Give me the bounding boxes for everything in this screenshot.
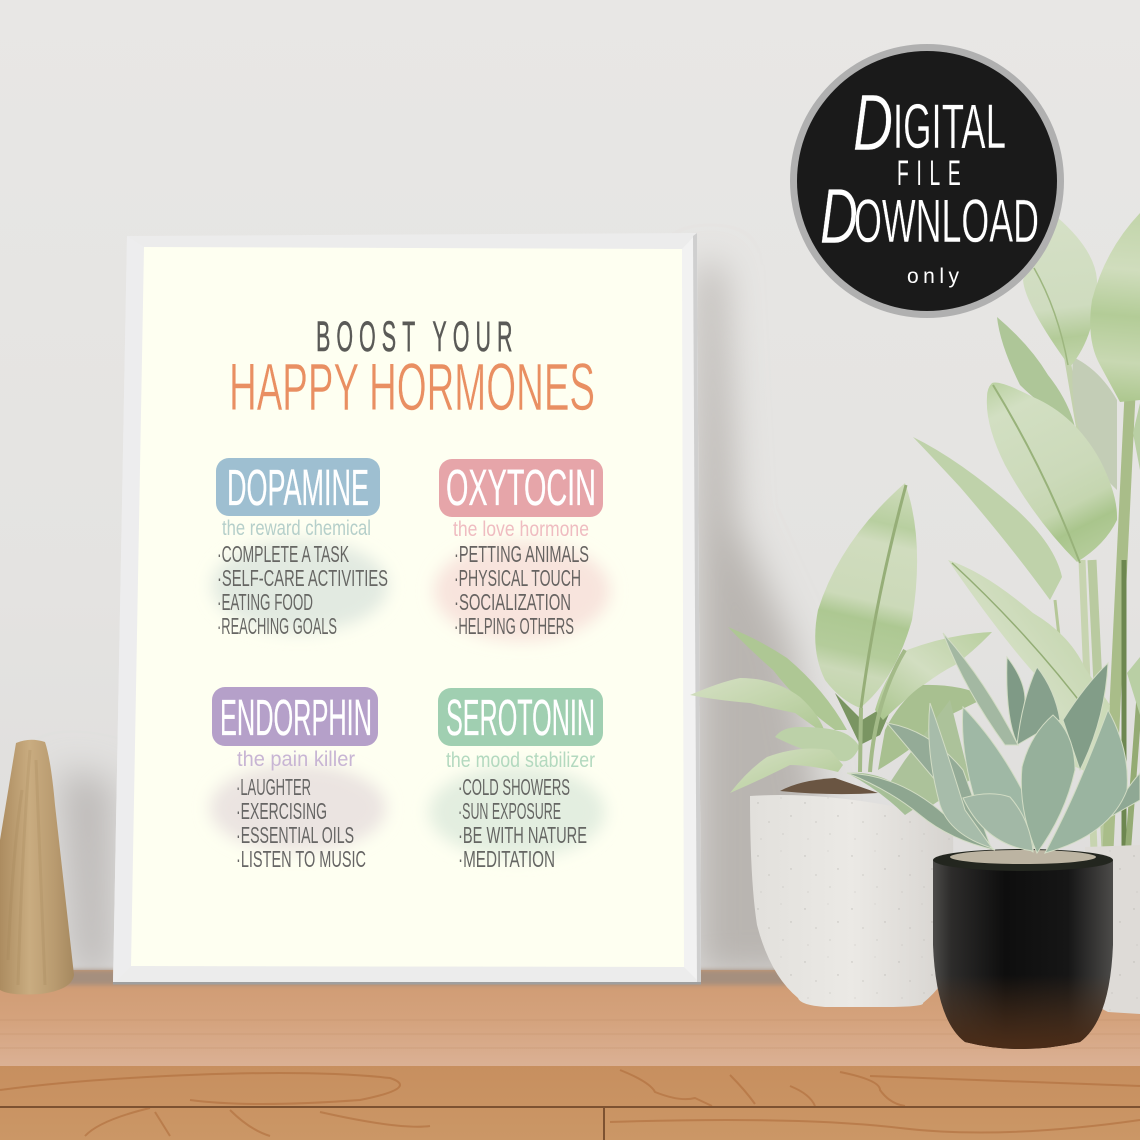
soft blob: oxytocin [434,541,610,641]
dopamine heading: DOPAMINE [227,459,369,516]
panel: oxytocin [439,459,603,639]
oxytocin list: ·PETTING ANIMALS [454,541,589,567]
soft blob: endorphin [210,764,386,852]
left white pot [750,773,954,1007]
serotonin list [458,774,587,872]
dopamine list: ·SELF-CARE ACTIVITIES [217,565,388,591]
badge text: digital: IGITAL [893,92,1006,162]
back leaves [1007,657,1025,745]
left big leaf [962,707,1033,852]
lower long leaf [948,560,1110,780]
narrow long leaf [913,437,1062,600]
small plant: leaves [690,483,992,810]
endorphin list: ·EXERCISING [236,798,327,824]
digital download badge [790,44,1064,318]
serotonin list: ·BE WITH NATURE [458,822,587,848]
oxytocin list: ·HELPING OTHERS [454,613,574,639]
top leaf [1023,217,1097,367]
poster paper [131,247,684,967]
oxytocin heading pill [439,459,603,517]
main right leaf [987,383,1117,562]
agave plant [847,633,1140,853]
centre leaf [1021,715,1075,853]
oxytocin subtitle: the love hormone [453,518,589,541]
far right lower leaf [1133,403,1140,470]
panel: endorphin: ENDORPHIN [220,689,372,746]
badge text: only: only [907,265,964,288]
serotonin list: ·COLD SHOWERS [458,774,570,800]
tabletop [0,970,1140,1140]
dopamine list: ·EATING FOOD [217,589,313,615]
narrow leaf [997,317,1075,427]
panel: serotonin [438,688,603,872]
endorphin list: ·LAUGHTER [236,774,311,800]
panel: dopamine [216,458,388,639]
soil [780,778,878,794]
panel: serotonin: SEROTONIN [446,689,595,746]
tall plant: leaves [913,213,1140,780]
upper left leaf [728,627,847,730]
endorphin subtitle: the pain killer [237,748,355,771]
tall plant: stems [1055,357,1140,850]
badge text: digital: D [853,78,893,167]
dopamine subtitle: the reward chemical [222,517,371,540]
oxytocin list: ·PHYSICAL TOUCH [454,565,581,591]
centre stalks [860,650,905,772]
endorphin heading pill [212,687,378,746]
serotonin list: ·SUN EXPOSURE [458,798,561,824]
dopamine heading pill [216,458,380,516]
endorphin list: ·ESSENTIAL OILS [236,822,354,848]
badge text: digital [853,78,1006,167]
frame shadow on wall [60,265,850,975]
right white pot [1085,845,1140,1014]
gravel [950,850,1096,864]
black pot [933,849,1113,1049]
endorphin list: ·LISTEN TO MUSIC [236,846,366,872]
badge text: download [820,172,1039,260]
right front leaf [1045,710,1127,853]
lower left leaf [730,749,843,793]
dark inner leaves [835,693,895,745]
far right leaf [1110,773,1140,817]
bottom left small leaf [963,794,1033,851]
endorphin list [236,774,366,872]
serotonin list: ·MEDITATION [458,846,555,872]
leaf behind right [1072,357,1117,490]
right second leaf [878,685,987,770]
right upper leaf [875,632,992,720]
oxytocin heading: OXYTOCIN [446,459,596,516]
thin long low leaf [887,723,990,845]
drooping leaf [847,773,920,815]
curled leaf [775,727,859,761]
badge text: download: D [820,172,858,260]
dopamine list: ·REACHING GOALS [217,613,337,639]
serotonin subtitle: the mood stabilizer [446,749,595,772]
oxytocin list [454,541,589,639]
dopamine list [217,541,388,639]
poster frame [113,233,701,984]
poster title: happy hormones: HAPPY HORMONES [229,350,595,425]
oxytocin list: ·SOCIALIZATION [454,589,571,615]
serotonin heading pill [438,688,603,746]
big centre leaf [815,483,917,708]
thin upper leaf [943,633,1018,745]
badge text: file: FILE [897,153,968,192]
panel: endorphin [212,687,378,872]
far left leaf [929,703,992,848]
poster title: boost your: BOOST YOUR [316,313,519,361]
dopamine list: ·COMPLETE A TASK [217,541,349,567]
far right leaf [1090,213,1140,402]
soft blob: dopamine [212,540,388,632]
table front edge [0,1066,1140,1140]
soft blob: serotonin [429,766,605,858]
long left leaf [690,678,826,735]
wooden cone ornament [0,740,74,994]
